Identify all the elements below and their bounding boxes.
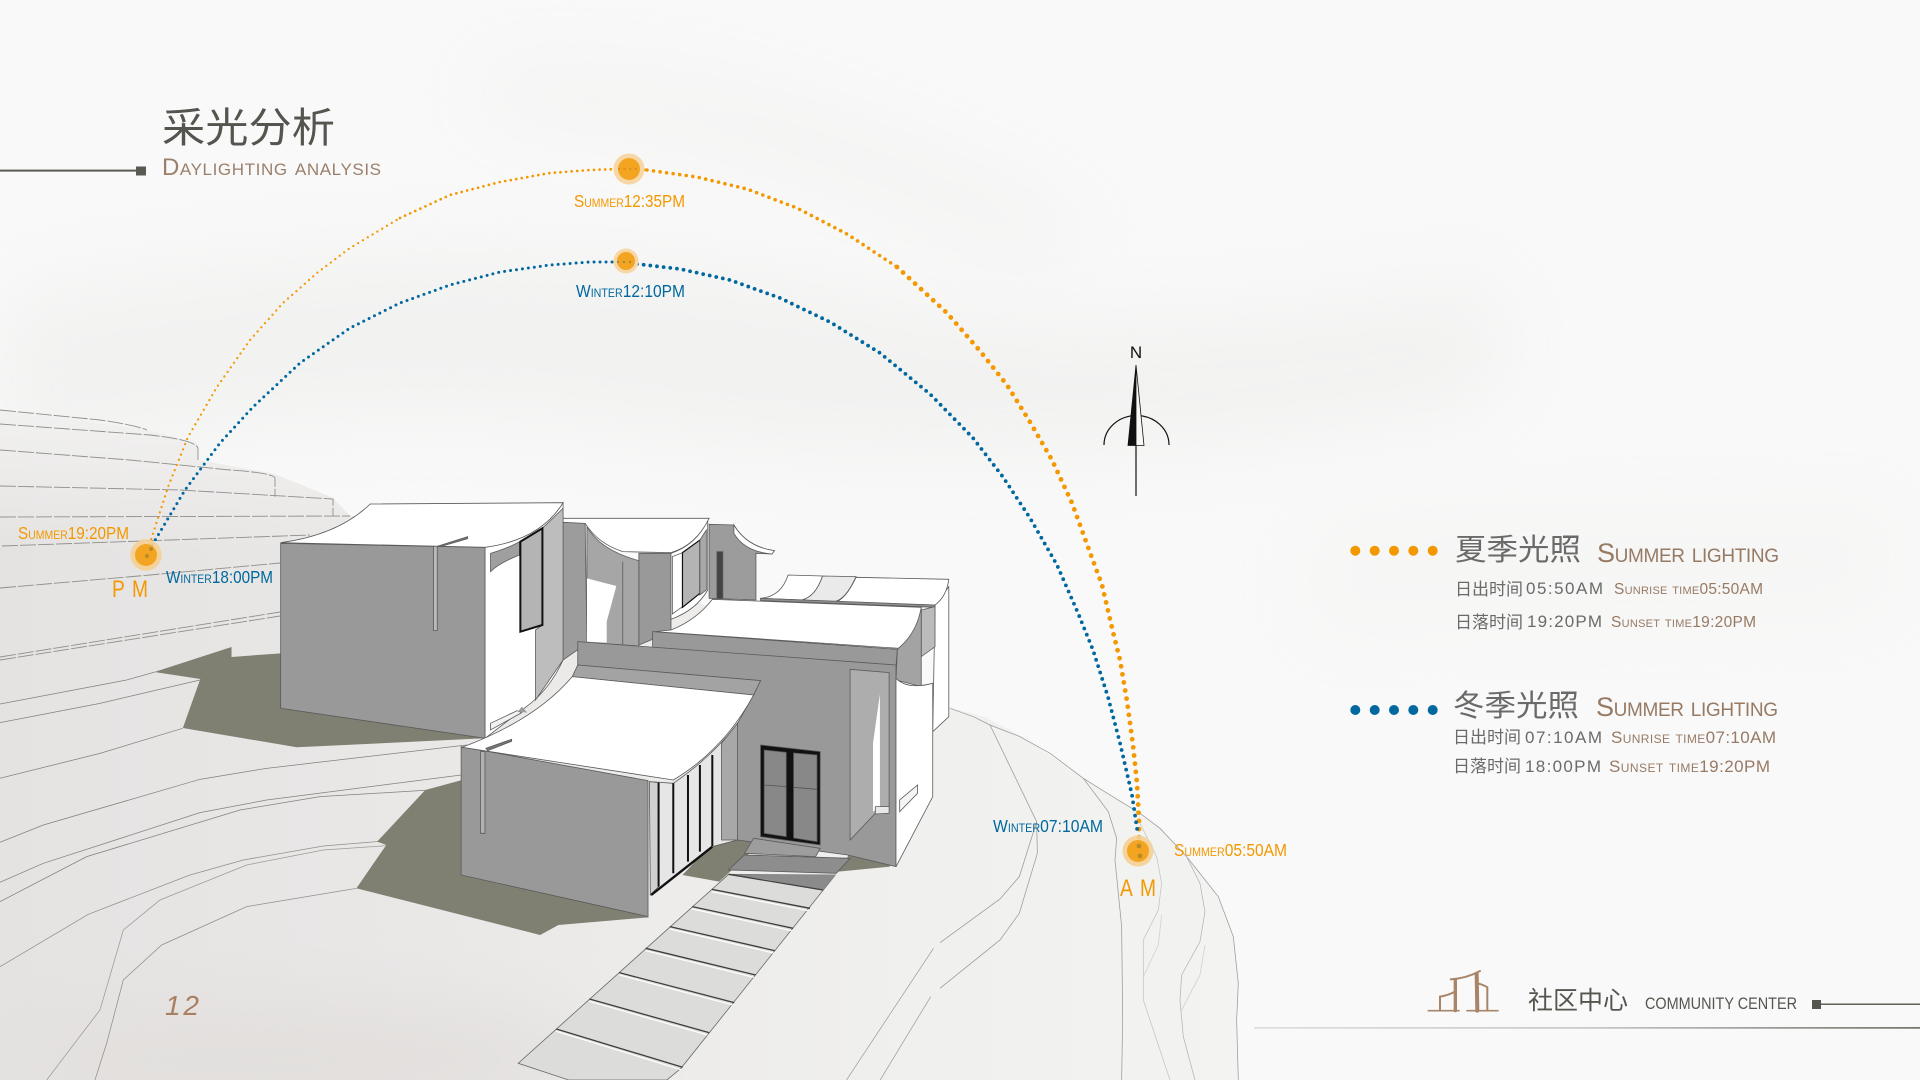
- entry door: [761, 745, 820, 845]
- winter sunrise row: Sunrise time07:10AM: [1611, 728, 1776, 747]
- label: winter noon: Winter12:10PM: [576, 281, 685, 301]
- winter sunrise row: 日出时间: [1453, 723, 1521, 748]
- title chinese: 采光分析: [162, 94, 335, 154]
- label: AM: A: [1120, 874, 1133, 902]
- right end wall: [896, 678, 933, 867]
- winter sunset row: [1453, 752, 1770, 777]
- summer sunrise row: [1455, 575, 1763, 600]
- summer sunrise row: 日出时间: [1455, 575, 1523, 600]
- summer sunrise row: 05:50AM: [1526, 579, 1603, 598]
- title: [0, 94, 382, 181]
- lower contour lines: [0, 672, 467, 1080]
- winter heading chinese: 冬季光照: [1453, 681, 1579, 725]
- summer sunrise row: Sunrise time05:50AM: [1614, 581, 1763, 598]
- footer name english: COMMUNITY CENTER: [1645, 994, 1797, 1013]
- ground shadows: [154, 647, 890, 935]
- summer heading chinese: 夏季光照: [1455, 525, 1581, 569]
- sun marker: PM: [130, 539, 162, 571]
- summer heading english: Summer lighting: [1597, 538, 1779, 568]
- footer: [1254, 971, 1920, 1029]
- title rule: [0, 166, 146, 176]
- winter sunset row: 18:00PM: [1525, 757, 1601, 776]
- legend: winter lighting: [1350, 681, 1778, 777]
- sun marker: winter noon: [614, 248, 638, 274]
- building model: [154, 503, 949, 935]
- north arrow compass: N: [1130, 343, 1142, 362]
- summer sunset row: 日落时间: [1455, 608, 1523, 633]
- footer marker rule: [1812, 1000, 1920, 1009]
- footer icon: building: [1428, 971, 1498, 1011]
- label: PM: P: [112, 575, 125, 603]
- alcove: [850, 669, 889, 840]
- winter sunrise row: [1453, 723, 1776, 748]
- terrace contour lines: [0, 410, 350, 660]
- right hill contour lines: [940, 708, 1238, 1080]
- label: winter sunset: Winter18:00PM: [166, 567, 273, 587]
- middle pavilion: [563, 518, 709, 660]
- label: summer sunset: Summer19:20PM: [18, 523, 129, 543]
- summer sunset row: Sunset time19:20PM: [1611, 614, 1756, 631]
- summer sun path arc: [146, 169, 1139, 856]
- left block: [281, 503, 563, 738]
- title english: Daylighting analysis: [162, 154, 382, 181]
- lower valley contour lines: [847, 948, 933, 1080]
- second block: [653, 599, 921, 687]
- winter sunset row: 日落时间: [1453, 752, 1521, 777]
- footer name chinese: 社区中心: [1528, 981, 1628, 1017]
- sun marker: AM: [1122, 836, 1154, 866]
- summer sunset row: 19:20PM: [1527, 612, 1602, 631]
- winter heading english: Summer lighting: [1596, 692, 1778, 722]
- page number: 12: [165, 990, 199, 1021]
- label: AM: M: [1140, 874, 1156, 902]
- north arrow compass: [1104, 343, 1169, 496]
- central wall: [572, 642, 896, 873]
- summer dot key: [1350, 546, 1438, 556]
- footer long rule: [1254, 1027, 1920, 1029]
- summer sunset row: [1455, 608, 1756, 633]
- label: summer noon: Summer12:35PM: [574, 191, 685, 211]
- winter sunset row: Sunset time19:20PM: [1609, 757, 1770, 776]
- legend: summer lighting: [1350, 525, 1779, 633]
- paved stepping path: [518, 874, 835, 1080]
- winter sunrise row: 07:10AM: [1525, 728, 1602, 747]
- label: winter sunrise: Winter07:10AM: [993, 816, 1103, 836]
- front block: [461, 677, 754, 917]
- label: PM: M: [132, 575, 148, 603]
- sun marker: summer noon: [614, 154, 644, 184]
- terrain: terraced hillside: [0, 410, 1238, 1080]
- winter sun path arc: [146, 262, 1138, 835]
- far pavilion: [709, 524, 774, 600]
- winter dot key: [1350, 705, 1438, 715]
- rear roof strip: [761, 575, 949, 732]
- label: summer sunrise: Summer05:50AM: [1174, 840, 1287, 860]
